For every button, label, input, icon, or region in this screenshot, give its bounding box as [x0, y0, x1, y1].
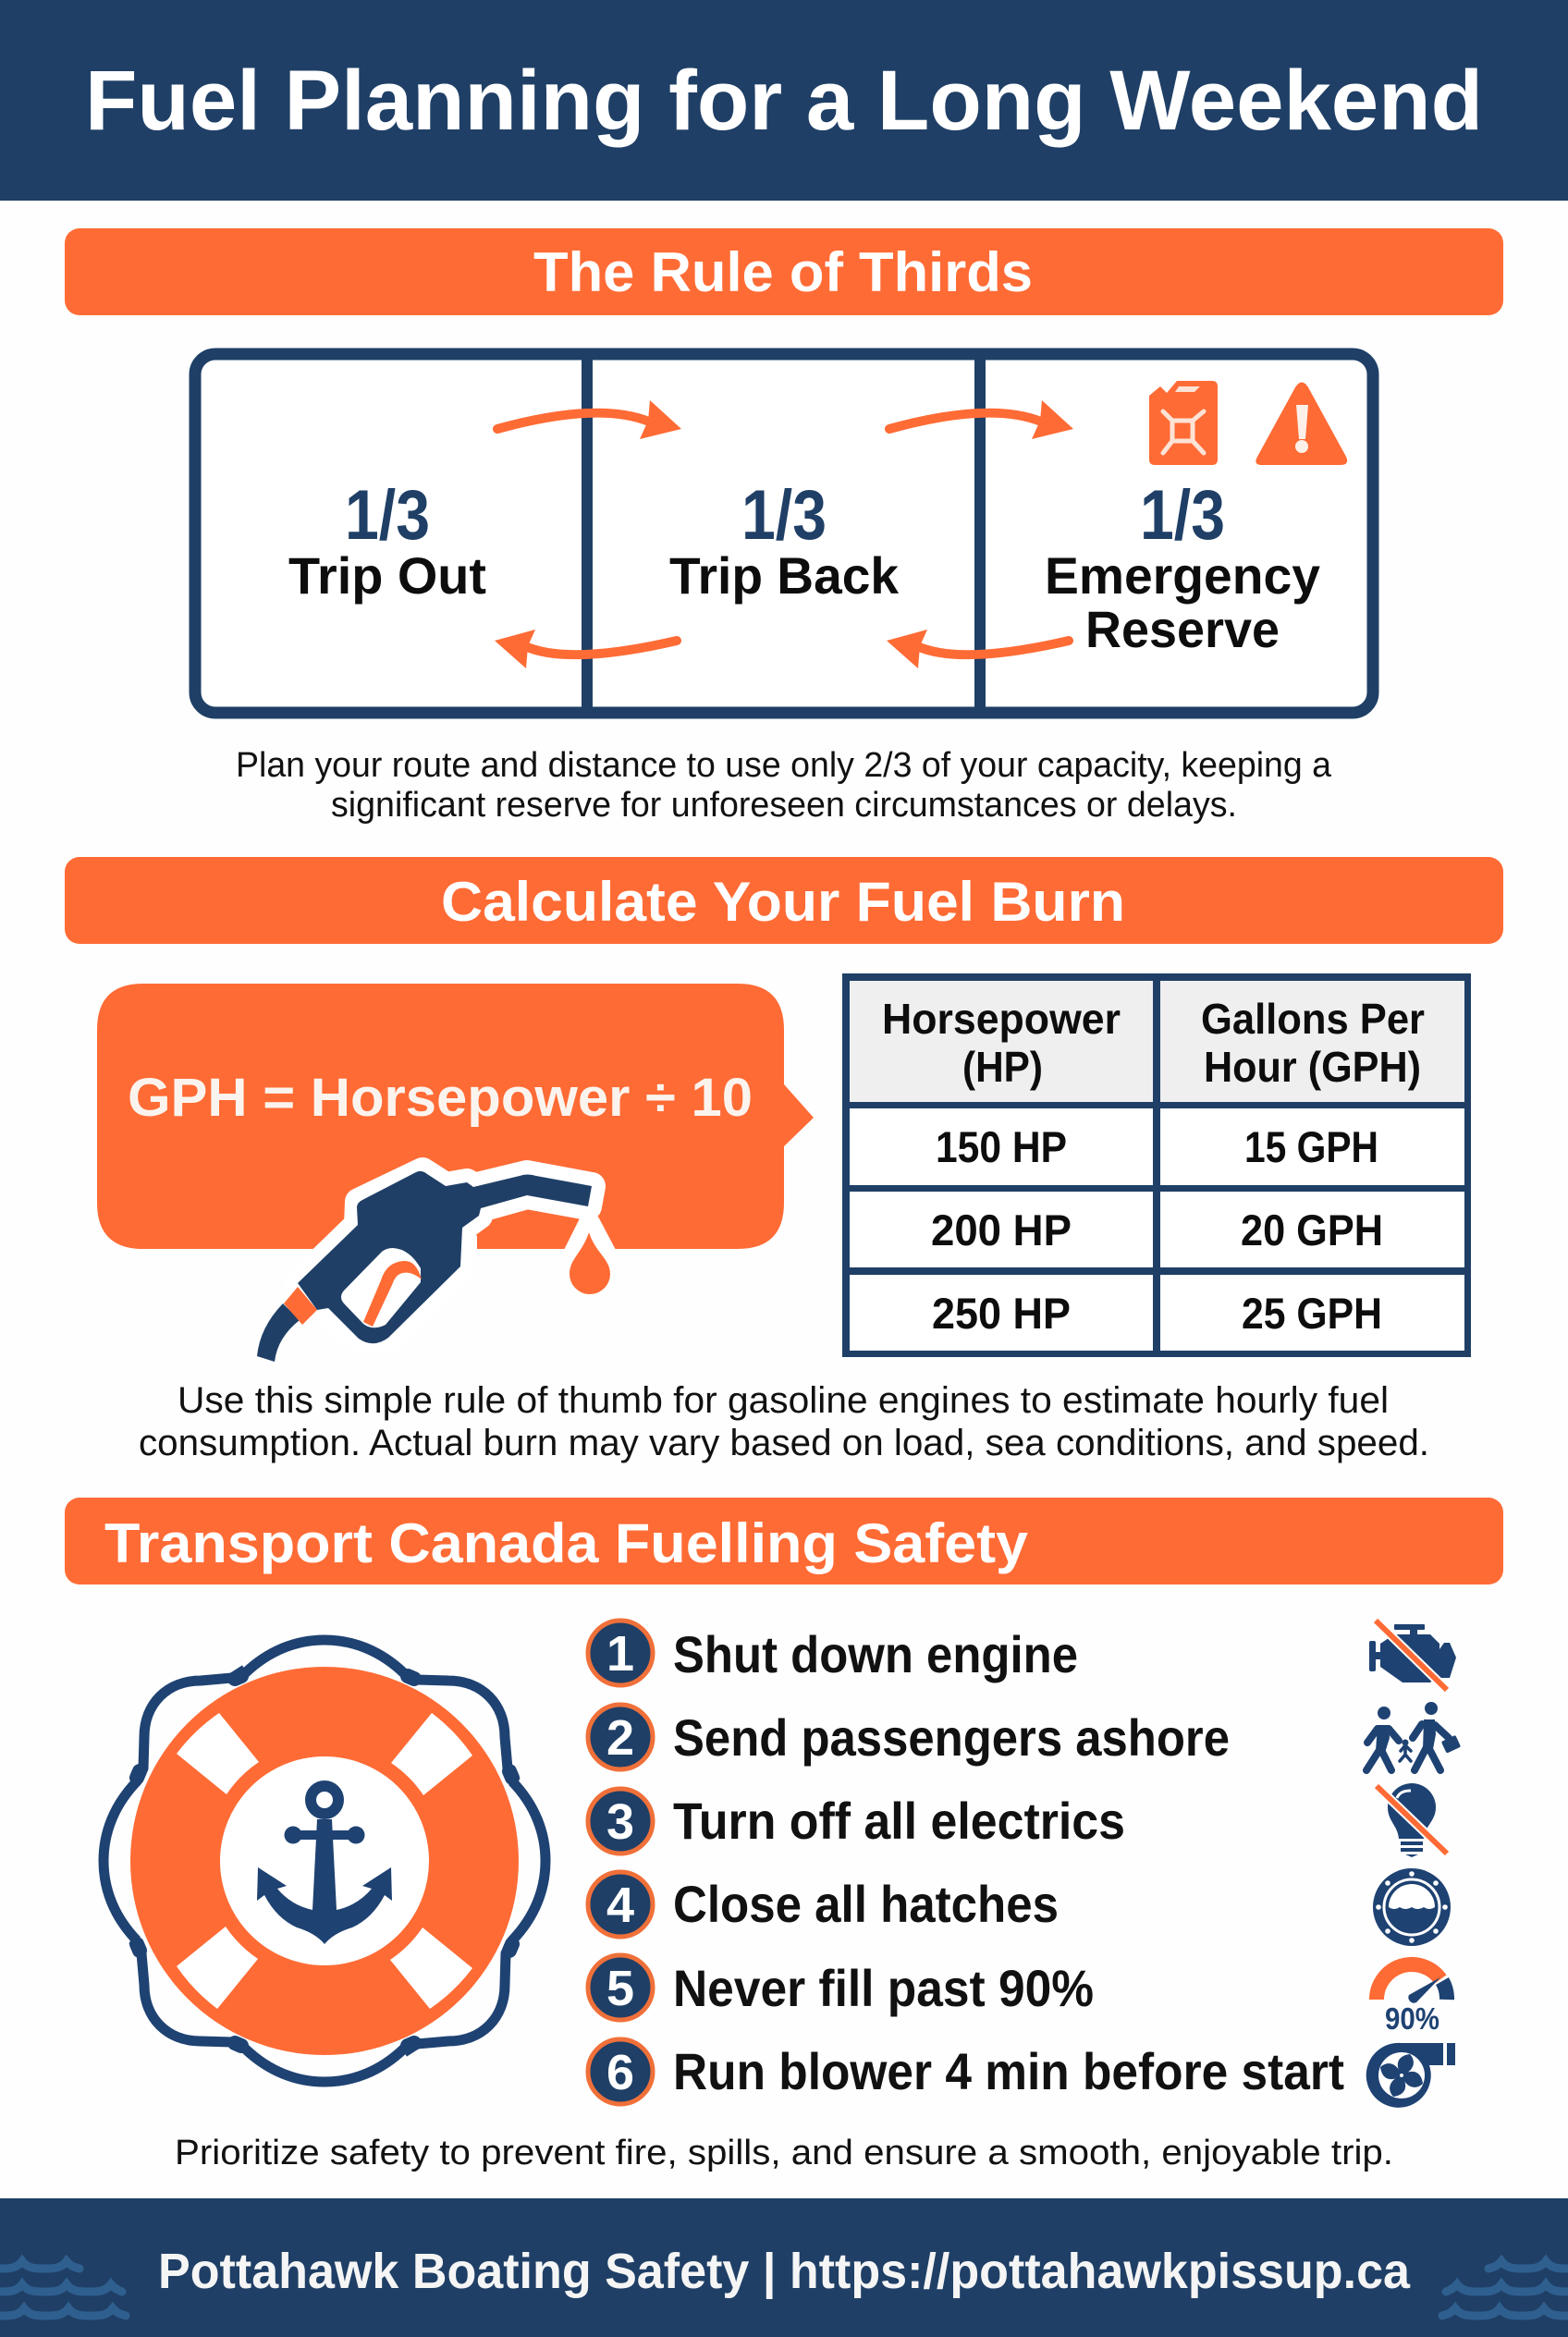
icon: 90 percent gauge	[1377, 1964, 1447, 2036]
footer banner	[0, 2198, 1568, 2337]
step 1: 1	[606, 1626, 634, 1682]
column: trip back	[669, 476, 900, 605]
arrow: trip out to trip back	[497, 400, 681, 439]
icon: jerry can	[1149, 381, 1218, 465]
text: fuel burn description	[139, 1380, 1429, 1463]
step 1	[588, 1621, 1078, 1685]
table rows: 25 GPH	[1242, 1289, 1382, 1338]
table header: (HP)	[962, 1043, 1043, 1091]
table rows	[931, 1122, 1383, 1338]
callout: GPH formula: GPH = Horsepower ÷ 10	[128, 1068, 753, 1128]
table header	[882, 995, 1425, 1091]
icon: 90 percent gauge: 90%	[1385, 2001, 1439, 2036]
section heading: Calculate Your Fuel Burn: Calculate Your Fuel Burn	[441, 871, 1125, 933]
ring	[130, 1667, 519, 2055]
step 5: 5	[606, 1961, 634, 2016]
column: trip out: Trip Out	[288, 546, 486, 605]
icon: fuel nozzle with drip	[257, 1171, 616, 1362]
text: rule of thirds description: significant reserve for unforeseen circumstances or delays.	[331, 786, 1237, 825]
panel: rule of thirds diagram	[195, 351, 1373, 716]
rope	[104, 1640, 545, 2082]
step 4	[588, 1872, 1059, 1937]
step 3: Turn off all electrics	[673, 1792, 1125, 1850]
column: emergency reserve: 1/3	[1140, 476, 1225, 555]
arrow: trip back return	[495, 630, 677, 668]
icon: hatch porthole	[1373, 1868, 1451, 1946]
table rows: 150 HP	[936, 1122, 1067, 1171]
icon: life ring with anchor	[104, 1640, 545, 2082]
icon: people walking ashore	[1366, 1702, 1461, 1770]
arrow: reserve return	[887, 630, 1069, 668]
section heading: Transport Canada Fuelling Safety: Transport Canada Fuelling Safety	[104, 1512, 1029, 1574]
column: trip out	[288, 476, 486, 605]
text: safety note: Prioritize safety to prevent fire, spills, and ensure a smooth, enjoyable trip.	[175, 2134, 1393, 2172]
title: Fuel Planning for a Long Weekend	[85, 54, 1483, 148]
icon: waves right	[1442, 2261, 1568, 2316]
arrow: trip back to reserve	[889, 400, 1073, 439]
column: trip back: 1/3	[741, 476, 827, 555]
section heading: Calculate Your Fuel Burn	[65, 857, 1503, 944]
column: trip back: Trip Back	[669, 546, 900, 605]
step 3: 3	[606, 1794, 634, 1850]
step 2: 2	[606, 1710, 634, 1766]
anchor	[257, 1786, 392, 1944]
list: fuelling safety steps	[588, 1621, 1344, 2104]
step 4: 4	[606, 1878, 634, 1933]
text: rule of thirds description: Plan your route and distance to use only 2/3 of your capacity, keeping a	[236, 746, 1332, 785]
section heading: The Rule of Thirds	[65, 228, 1503, 315]
column: trip out: 1/3	[345, 476, 430, 555]
step 5: Never fill past 90%	[673, 1959, 1094, 2017]
table header: Hour (GPH)	[1204, 1043, 1421, 1091]
step 1: Shut down engine	[673, 1625, 1078, 1683]
icon: engine off	[1369, 1621, 1456, 1690]
text: fuel burn description: Use this simple rule of thumb for gasoline engines to estimate hourly fuel	[178, 1380, 1389, 1421]
step 6: Run blower 4 min before start	[673, 2042, 1344, 2100]
column: emergency reserve	[1045, 476, 1320, 658]
table rows: 15 GPH	[1244, 1122, 1378, 1171]
icon: waves left	[0, 2261, 126, 2316]
table rows: 200 HP	[931, 1205, 1072, 1254]
table header: Horsepower	[882, 995, 1121, 1043]
step 6: 6	[606, 2045, 634, 2100]
icon: electrics off	[1377, 1783, 1447, 1857]
icon: blower fan	[1366, 2043, 1455, 2108]
table: horsepower to gallons per hour	[842, 973, 1471, 1357]
column: emergency reserve: Reserve	[1085, 600, 1280, 658]
step 2: Send passengers ashore	[673, 1708, 1230, 1767]
text: rule of thirds description	[236, 746, 1332, 825]
column: emergency reserve: Emergency	[1045, 546, 1320, 605]
callout: GPH formula	[97, 984, 814, 1249]
icon: warning triangle	[1256, 383, 1347, 465]
table rows: 250 HP	[932, 1289, 1071, 1338]
header banner	[0, 0, 1568, 201]
text: fuel burn description: consumption. Actual burn may vary based on load, sea conditions, and speed.	[139, 1423, 1429, 1463]
section heading: Transport Canada Fuelling Safety	[65, 1498, 1503, 1585]
table rows: 20 GPH	[1241, 1205, 1383, 1254]
table header: Gallons Per	[1201, 995, 1425, 1043]
footer text: Pottahawk Boating Safety | https://pottahawkpissup.ca	[158, 2244, 1411, 2300]
step 4: Close all hatches	[673, 1875, 1059, 1933]
section heading: The Rule of Thirds: The Rule of Thirds	[533, 241, 1033, 303]
